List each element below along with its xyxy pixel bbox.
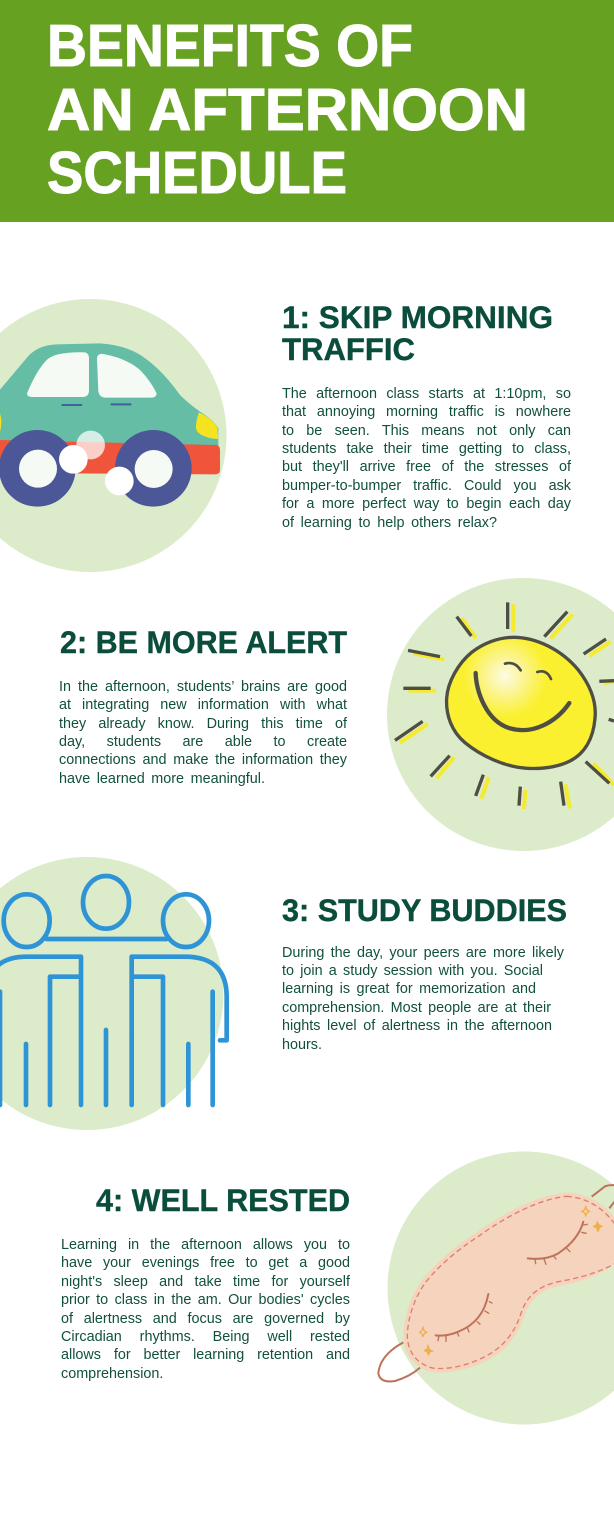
text: skip morning traffic: to be seen. This means not only can xyxy=(282,422,571,438)
title: AN AFTERNOON xyxy=(47,77,528,143)
text: study buddies: During the day, your peers are more likely xyxy=(282,944,564,960)
heading: skip morning traffic: TRAFFIC xyxy=(282,331,415,367)
heading: skip morning traffic xyxy=(282,299,553,367)
text: well rested: prior to class in the am. Our bodies' cycles xyxy=(61,1292,350,1308)
text: well rested: Circadian rhythms. Being well rested xyxy=(61,1329,350,1345)
icon: three people in green circle xyxy=(0,857,227,1130)
text: be more alert: at integrating new information with what xyxy=(59,697,347,713)
text: well rested: night's sleep and take time for yourself xyxy=(61,1274,350,1290)
text: well rested: comprehension. xyxy=(61,1366,163,1382)
text: study buddies: hights level of alertness in the afternoon xyxy=(282,1018,552,1034)
text: study buddies: hours. xyxy=(282,1037,322,1053)
text: be more alert xyxy=(59,679,348,787)
icon: sleep mask in green circle xyxy=(378,1152,614,1424)
text: be more alert: connections and make the information they xyxy=(59,752,347,768)
text: be more alert: day, students are able to create xyxy=(59,734,347,750)
text: be more alert: they already know. During this time of xyxy=(59,716,347,732)
text: skip morning traffic: The afternoon class starts at 1:10pm, so xyxy=(282,386,571,402)
text: be more alert: have learned more meaningful. xyxy=(59,771,265,787)
text: skip morning traffic: students take their time getting to class, xyxy=(282,441,571,457)
heading: well rested: 4: WELL RESTED xyxy=(96,1182,350,1218)
text: skip morning traffic: but they'll arrive free of the stresses of xyxy=(282,459,571,475)
text: well rested xyxy=(61,1237,350,1382)
text: well rested: Learning in the afternoon allows you to xyxy=(61,1237,350,1253)
header banner xyxy=(0,0,614,222)
title xyxy=(47,13,528,206)
icon: smiling sun in green circle xyxy=(387,578,614,851)
title: SCHEDULE xyxy=(47,140,347,206)
text: study buddies xyxy=(282,944,564,1053)
text: well rested: of alertness and focus are governed by xyxy=(61,1311,350,1327)
text: study buddies: comprehension. Most people are at their xyxy=(282,1000,551,1016)
heading: skip morning traffic: 1: SKIP MORNING xyxy=(282,299,553,335)
title: BENEFITS OF xyxy=(47,13,413,79)
text: skip morning traffic: of learning to help others relax? xyxy=(282,515,497,531)
text: study buddies: learning is great for memorization and xyxy=(282,981,536,997)
heading: study buddies: 3: STUDY BUDDIES xyxy=(282,892,567,928)
heading: be more alert: 2: BE MORE ALERT xyxy=(60,624,347,660)
text: study buddies: to join a study session with you. Social xyxy=(282,963,543,979)
text: skip morning traffic: that annoying morning traffic is nowhere xyxy=(282,404,571,420)
text: be more alert: In the afternoon, students’ brains are good xyxy=(59,679,347,695)
text: well rested: allows for better learning retention and xyxy=(61,1347,350,1363)
text: skip morning traffic: for a more perfect way to begin each day xyxy=(282,496,571,512)
icon: car in green circle xyxy=(0,299,226,572)
text: skip morning traffic xyxy=(282,386,572,531)
text: skip morning traffic: bumper-to-bumper traffic. Could you ask xyxy=(282,478,571,494)
text: well rested: have your evenings free to get a good xyxy=(61,1255,350,1271)
